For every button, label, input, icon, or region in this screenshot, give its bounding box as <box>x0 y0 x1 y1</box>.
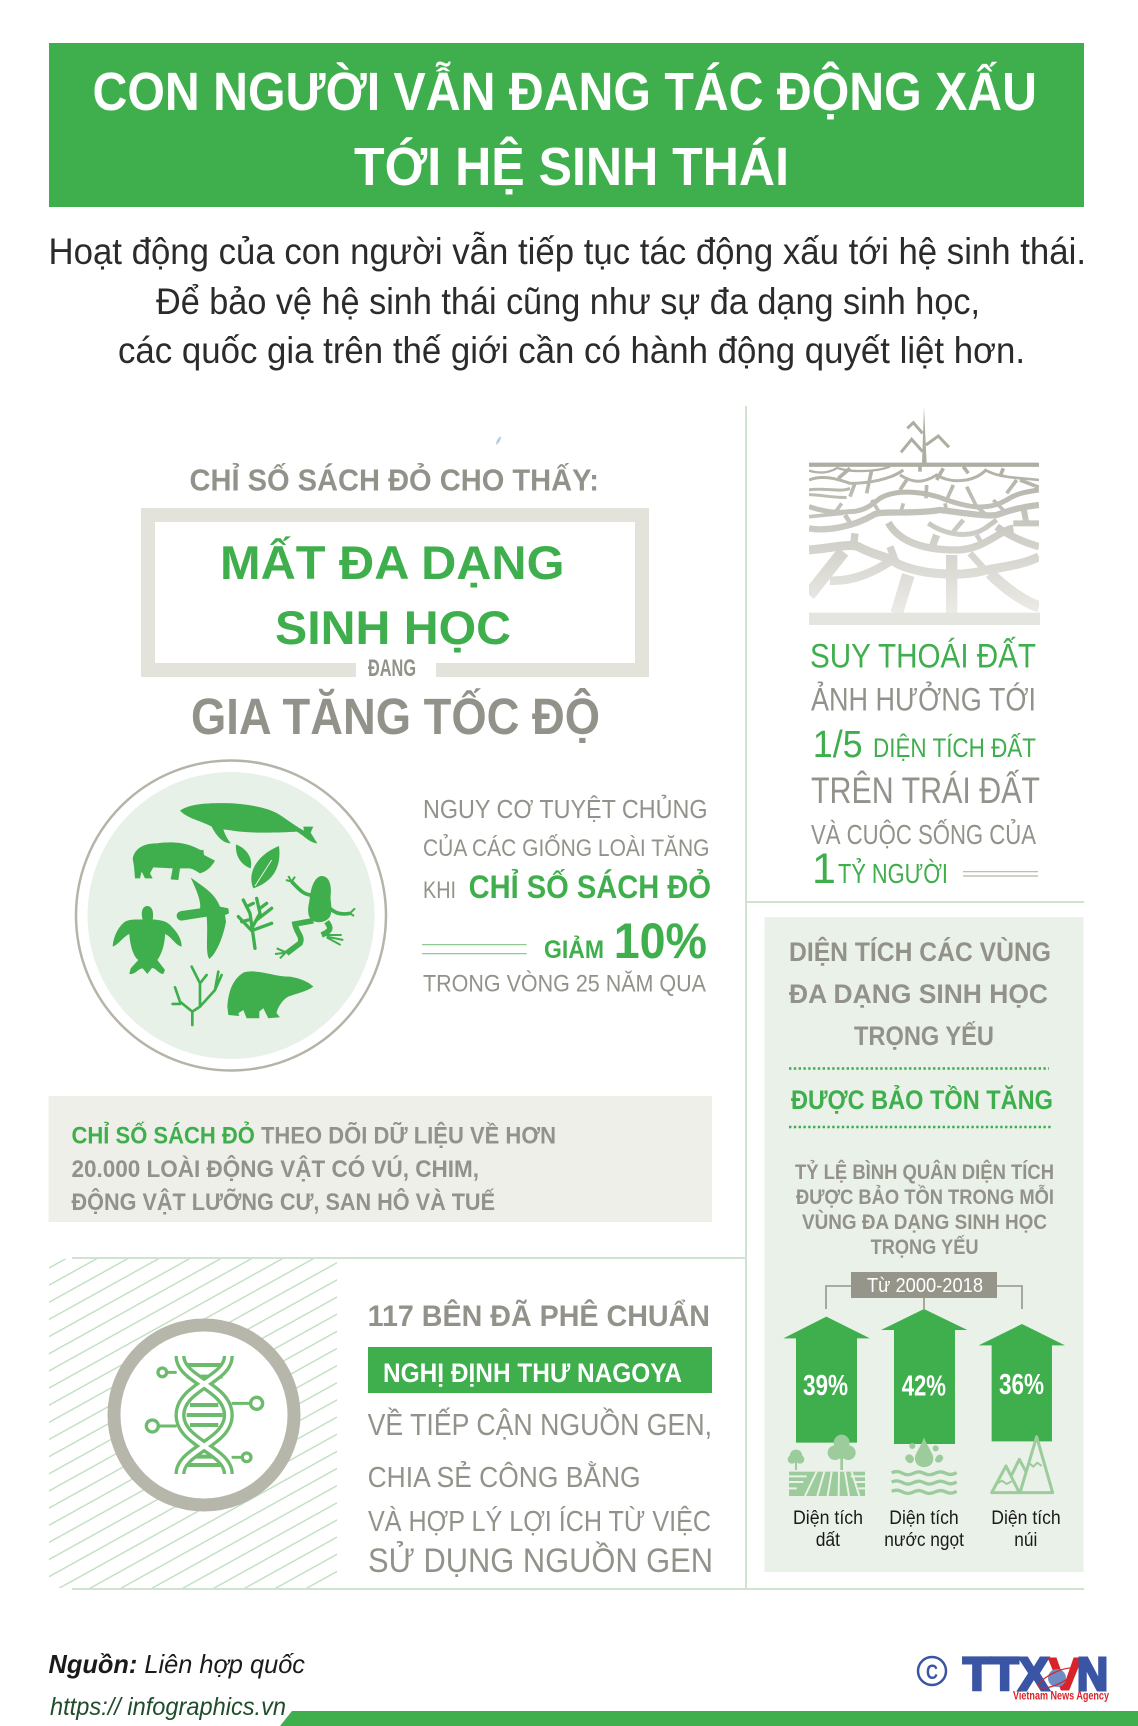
text block: land degradation: TRÊN TRÁI ĐẤT <box>811 770 1040 811</box>
arrows <box>783 1309 1065 1444</box>
logo: TTXVN: V <box>1048 1648 1082 1700</box>
heading: red list shows: CHỈ SỐ SÁCH ĐỎ CHO THẤY: <box>190 462 599 498</box>
text block: Nagoya protocol: VỀ TIẾP CẬN NGUỒN GEN, <box>368 1406 712 1442</box>
category labels: Diện tích <box>793 1508 863 1529</box>
category labels: Diện tích <box>889 1508 959 1529</box>
text block: land degradation: DIỆN TÍCH ĐẤT <box>873 732 1036 763</box>
icon: seaweed <box>238 898 272 948</box>
text block: land degradation <box>810 637 1040 893</box>
text block: Nagoya protocol <box>368 1299 713 1580</box>
panel: protected areas: 36% <box>999 1369 1044 1401</box>
text block: land degradation: 1 <box>812 845 836 893</box>
icon: cracked soil with dry plant <box>809 407 1040 625</box>
text block: extinction risk: TRONG VÒNG 25 NĂM QUA <box>423 970 706 998</box>
icon: circle of species <box>76 760 386 1070</box>
title banner <box>49 43 1084 207</box>
label: dang: ĐANG <box>368 655 416 682</box>
text block: extinction risk: 10% <box>614 913 707 969</box>
panel dividers <box>72 406 1084 1589</box>
small mark <box>496 436 501 445</box>
logo: TTXVN: TTX <box>963 1648 1049 1700</box>
panel: protected areas: TRỌNG YẾU <box>854 1020 994 1051</box>
icon: branch coral <box>173 967 222 1025</box>
icon: DNA in ring <box>114 1325 294 1505</box>
values: 39% <box>803 1370 848 1402</box>
category labels: nước ngọt <box>884 1530 965 1551</box>
text block: extinction risk: CỦA CÁC GIỐNG LOÀI TĂNG <box>423 833 710 862</box>
panel: protected areas <box>764 917 1084 1572</box>
text block: land degradation: SUY THOÁI ĐẤT <box>810 637 1036 675</box>
panel: protected areas: 42% <box>902 1371 946 1403</box>
text block: Nagoya protocol: CHIA SẺ CÔNG BẰNG <box>368 1460 641 1494</box>
intro text: Để bảo vệ hệ sinh thái cũng như sự đa dạng sinh học, <box>156 281 980 322</box>
category labels <box>793 1508 1061 1551</box>
logo: TTXVN: N <box>1077 1648 1108 1700</box>
text block: Nagoya protocol: VÀ HỢP LÝ LỢI ÍCH TỪ VIỆC <box>368 1505 711 1538</box>
panel: red list index: SINH HỌC <box>275 601 511 654</box>
headline: accelerating: GIA TĂNG TỐC ĐỘ <box>191 687 600 745</box>
period label <box>851 1272 997 1298</box>
source line: Nguồn: Liên hợp quốc <box>48 1649 305 1679</box>
icon: whale <box>180 803 317 843</box>
text block: Nagoya protocol: SỬ DỤNG NGUỒN GEN <box>368 1542 713 1580</box>
panel: protected areas: ĐƯỢC BẢO TỒN TĂNG <box>791 1083 1053 1115</box>
icon: bear <box>227 971 313 1018</box>
panel: red list note: CHỈ SỐ SÁCH ĐỎ THEO DÕI DỮ LIỆU VỀ HƠN <box>72 1120 556 1150</box>
category labels: núi <box>1014 1530 1037 1551</box>
text block: land degradation: TỶ NGƯỜI <box>838 857 948 889</box>
panel: red list index <box>148 436 642 745</box>
footer bar <box>280 1711 1138 1726</box>
logo: TTXVN: C <box>926 1661 938 1684</box>
panel: protected areas: ĐA DẠNG SINH HỌC <box>789 979 1048 1009</box>
text block: land degradation: VÀ CUỘC SỐNG CỦA <box>811 818 1036 850</box>
text block: extinction risk: KHI <box>423 877 456 904</box>
text block: extinction risk: GIẢM <box>544 934 604 964</box>
icon: frog <box>275 876 355 958</box>
icon: mountains <box>992 1437 1053 1493</box>
icon: rhino <box>133 842 215 880</box>
icon: land <box>788 1435 865 1496</box>
headline: biodiversity loss: MẤT ĐA DẠNG <box>220 536 564 589</box>
text block: extinction risk <box>422 793 711 998</box>
panel: protected areas: TRỌNG YẾU <box>871 1236 978 1259</box>
website url: https:// infographics.vn <box>50 1693 286 1721</box>
frame <box>148 515 642 670</box>
text block: Nagoya protocol: 117 BÊN ĐÃ PHÊ CHUẨN <box>368 1299 710 1333</box>
icon: turtle <box>113 906 182 974</box>
heading: DIỆN TÍCH CÁC VÙNG <box>789 936 1051 967</box>
panel: red list note <box>48 1096 712 1222</box>
text block: land degradation: ẢNH HƯỞNG TỚI <box>811 682 1036 718</box>
logo: TTXVN <box>918 1648 1109 1702</box>
panel: protected areas: ĐƯỢC BẢO TỒN TRONG MỖI <box>796 1185 1054 1209</box>
panel: hatched background <box>49 1259 337 1588</box>
logo: TTXVN: Vietnam News Agency <box>1013 1688 1109 1702</box>
subheading: TỶ LỆ BÌNH QUÂN DIỆN TÍCH <box>795 1160 1054 1184</box>
intro text: các quốc gia trên thế giới cần có hành động quyết liệt hơn. <box>118 330 1025 371</box>
panel: red list note: ĐỘNG VẬT LƯỠNG CƯ, SAN HÔ VÀ TUẾ <box>72 1188 495 1216</box>
category labels: dất <box>816 1530 841 1551</box>
icon: water <box>892 1437 957 1493</box>
intro text <box>48 231 1086 371</box>
intro text: Hoạt động của con người vẫn tiếp tục tác động xấu tới hệ sinh thái. <box>48 231 1086 272</box>
title line 1: CON NGƯỜI VẪN ĐANG TÁC ĐỘNG XẤU <box>92 61 1037 122</box>
icon: bird <box>177 878 229 959</box>
text block: land degradation: 1/5 <box>813 724 863 766</box>
text block: Nagoya protocol: NGHỊ ĐỊNH THƯ NAGOYA <box>383 1358 682 1388</box>
panel: protected areas: VÙNG ĐA DẠNG SINH HỌC <box>802 1210 1047 1234</box>
panel: red list note: 20.000 LOÀI ĐỘNG VẬT CÓ VÚ, CHIM, <box>72 1155 479 1183</box>
text block: extinction risk: CHỈ SỐ SÁCH ĐỎ <box>469 869 711 905</box>
text block: extinction risk: NGUY CƠ TUYỆT CHỦNG <box>423 793 708 824</box>
panel: protected areas: Từ 2000-2018 <box>867 1275 983 1297</box>
title line 2: TỚI HỆ SINH THÁI <box>354 136 789 197</box>
period connector <box>826 1286 1022 1309</box>
icon: leaves <box>236 844 279 888</box>
category labels: Diện tích <box>991 1508 1061 1529</box>
